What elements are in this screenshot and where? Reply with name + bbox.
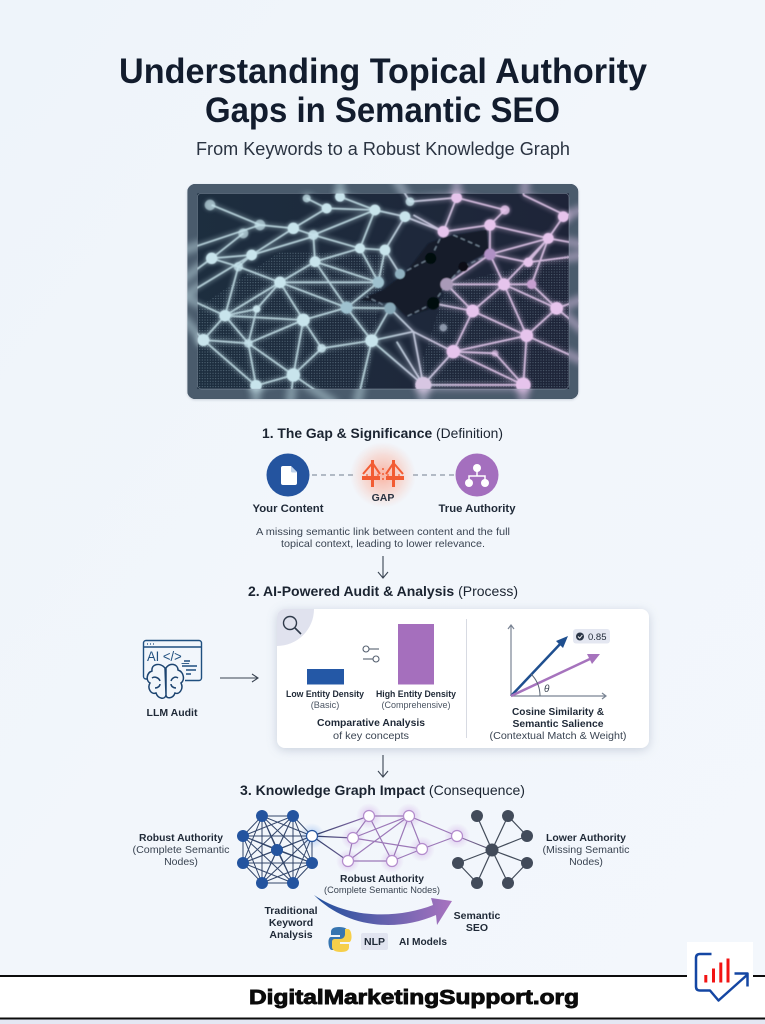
section 1: the gap and significance xyxy=(252,425,516,550)
label: robust authority left: Robust Authority xyxy=(139,832,223,844)
footer site name: DigitalMarketingSupport.org xyxy=(249,986,579,1009)
label: cosine similarity: Semantic Salience xyxy=(512,718,604,730)
panel: analysis card xyxy=(277,609,649,748)
heading: section 2: 2. AI-Powered Audit & Analysis (Process) xyxy=(248,583,518,599)
label: low entity density xyxy=(286,689,365,710)
label: robust authority left: Nodes) xyxy=(164,856,198,868)
subtitle: From Keywords to a Robust Knowledge Graph xyxy=(196,139,570,159)
label: traditional keyword analysis xyxy=(264,905,318,941)
chart: cosine similarity vectors xyxy=(508,625,610,699)
icon: comparison sliders xyxy=(363,646,379,662)
label: comparative analysis: of key concepts xyxy=(333,730,409,742)
label: lower authority xyxy=(542,832,630,868)
icon: LLM audit window and brain xyxy=(144,640,202,698)
network: lower authority sparse xyxy=(452,810,533,889)
connector dashes xyxy=(312,474,455,476)
section 3: knowledge graph impact xyxy=(132,782,630,952)
label: comparative analysis: Comparative Analysis xyxy=(317,717,425,729)
label: AI models: AI Models xyxy=(399,936,447,948)
footer band xyxy=(0,975,765,1024)
network: robust authority blue xyxy=(237,810,325,889)
icon: python logo xyxy=(328,927,352,952)
label: LLM audit: LLM Audit xyxy=(147,707,198,719)
label: low entity density: Low Entity Density xyxy=(286,689,365,699)
label: semantic SEO xyxy=(454,910,501,934)
label: true authority: True Authority xyxy=(438,503,516,515)
label: lower authority: Nodes) xyxy=(569,856,603,868)
badge: NLP xyxy=(361,933,388,950)
label: high entity density: High Entity Density xyxy=(376,689,457,699)
definition text xyxy=(256,526,510,550)
label: high entity density xyxy=(376,689,457,710)
label: semantic SEO: SEO xyxy=(466,922,488,934)
label: lower authority: Lower Authority xyxy=(546,832,626,844)
title xyxy=(119,52,648,130)
label: robust authority center: Robust Authority xyxy=(340,873,424,885)
logo: chart speech bubble with arrow xyxy=(687,942,753,1002)
chart: cosine similarity vectors: θ xyxy=(544,684,550,695)
icon: your content document xyxy=(266,454,310,496)
bar: high entity density xyxy=(398,624,434,684)
arrow: audit to analysis xyxy=(220,674,258,682)
magnifier corner xyxy=(277,609,314,646)
arrow: section 2 to 3 xyxy=(378,755,388,777)
label: cosine similarity: (Contextual Match & Weight) xyxy=(490,730,626,742)
label: low entity density: (Basic) xyxy=(311,700,339,710)
arrow: section 1 to 2 xyxy=(378,556,388,578)
label: cosine similarity: Cosine Similarity & xyxy=(512,706,604,718)
heading: section 3: 3. Knowledge Graph Impact (Consequence) xyxy=(240,782,525,798)
label: comparative analysis xyxy=(317,717,425,742)
chart: cosine similarity vectors: 0.85 xyxy=(588,632,606,643)
label: traditional keyword analysis: Analysis xyxy=(269,929,313,941)
label: gap: GAP xyxy=(372,492,394,504)
badge: NLP: NLP xyxy=(364,936,385,948)
bar: low entity density xyxy=(307,669,344,684)
label: robust authority center xyxy=(324,873,440,896)
label: cosine similarity xyxy=(490,706,626,742)
label: traditional keyword analysis: Traditional xyxy=(264,905,318,917)
hero image: knowledge graph network with a gap xyxy=(180,175,585,405)
label: robust authority center: (Complete Semantic Nodes) xyxy=(324,885,440,896)
arrow: keyword to semantic swoosh xyxy=(314,895,452,925)
icon: broken bridge gap xyxy=(350,442,416,508)
label: high entity density: (Comprehensive) xyxy=(382,700,450,710)
section 2: AI-powered audit xyxy=(144,583,649,748)
definition text: A missing semantic link between content and the full xyxy=(256,526,510,538)
label: semantic SEO: Semantic xyxy=(454,910,501,922)
label: robust authority left xyxy=(132,832,230,868)
label: lower authority: (Missing Semantic xyxy=(542,844,630,856)
title: Understanding Topical Authority xyxy=(119,52,648,91)
definition text: topical context, leading to lower relevance. xyxy=(281,538,485,550)
icon: true authority hierarchy xyxy=(456,454,498,496)
heading: section 1: 1. The Gap & Significance (Definition) xyxy=(262,425,503,441)
icon: LLM audit window and brain: AI </>_ xyxy=(147,648,189,664)
label: your content: Your Content xyxy=(252,503,324,515)
label: traditional keyword analysis: Keyword xyxy=(269,917,313,929)
network: robust authority purple xyxy=(306,803,492,873)
label: robust authority left: (Complete Semantic xyxy=(132,844,230,856)
title: Gaps in Semantic SEO xyxy=(205,91,560,130)
